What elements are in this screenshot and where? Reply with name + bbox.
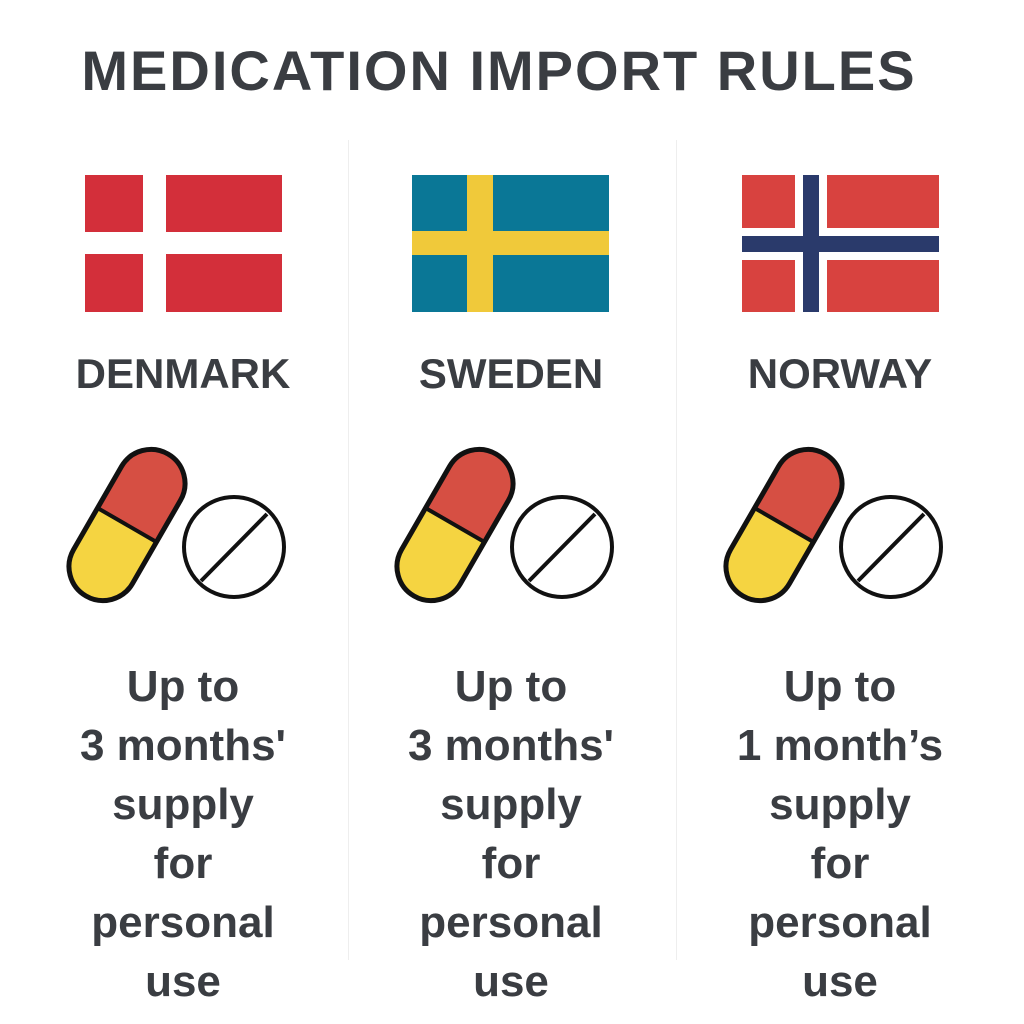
text: Norway <box>737 662 943 1006</box>
text: Denmark: use <box>145 957 221 1006</box>
text: Norway: 1 month’s <box>737 721 943 770</box>
text: Norway: Up to <box>784 662 896 711</box>
flag: Norway <box>742 175 939 312</box>
text: Sweden <box>408 662 614 1006</box>
text: Denmark: personal <box>91 898 275 947</box>
text: Sweden: 3 months' <box>408 721 614 770</box>
text: Sweden: supply <box>440 780 582 829</box>
text: Norway: personal <box>748 898 932 947</box>
name: Norway: NORWAY <box>748 350 932 397</box>
text: Denmark <box>80 662 286 1006</box>
text: Sweden: personal <box>419 898 603 947</box>
text: Sweden: use <box>473 957 549 1006</box>
text: Denmark: 3 months' <box>80 721 286 770</box>
text: Denmark: supply <box>112 780 254 829</box>
text: Denmark: for <box>154 839 212 888</box>
icon: pills Denmark <box>57 437 284 613</box>
flag: Sweden <box>412 175 609 312</box>
text: Sweden: for <box>482 839 540 888</box>
name: Denmark: DENMARK <box>76 350 290 397</box>
text: Sweden: Up to <box>455 662 567 711</box>
flag: Denmark <box>85 175 282 312</box>
text: Norway: for <box>811 839 869 888</box>
text: Norway: use <box>802 957 878 1006</box>
title: MEDICATION IMPORT RULES <box>81 39 917 102</box>
text: Denmark: Up to <box>127 662 239 711</box>
text: Norway: supply <box>769 780 911 829</box>
icon: pills Norway <box>714 437 941 613</box>
name: Sweden: SWEDEN <box>419 350 603 397</box>
icon: pills Sweden <box>385 437 612 613</box>
